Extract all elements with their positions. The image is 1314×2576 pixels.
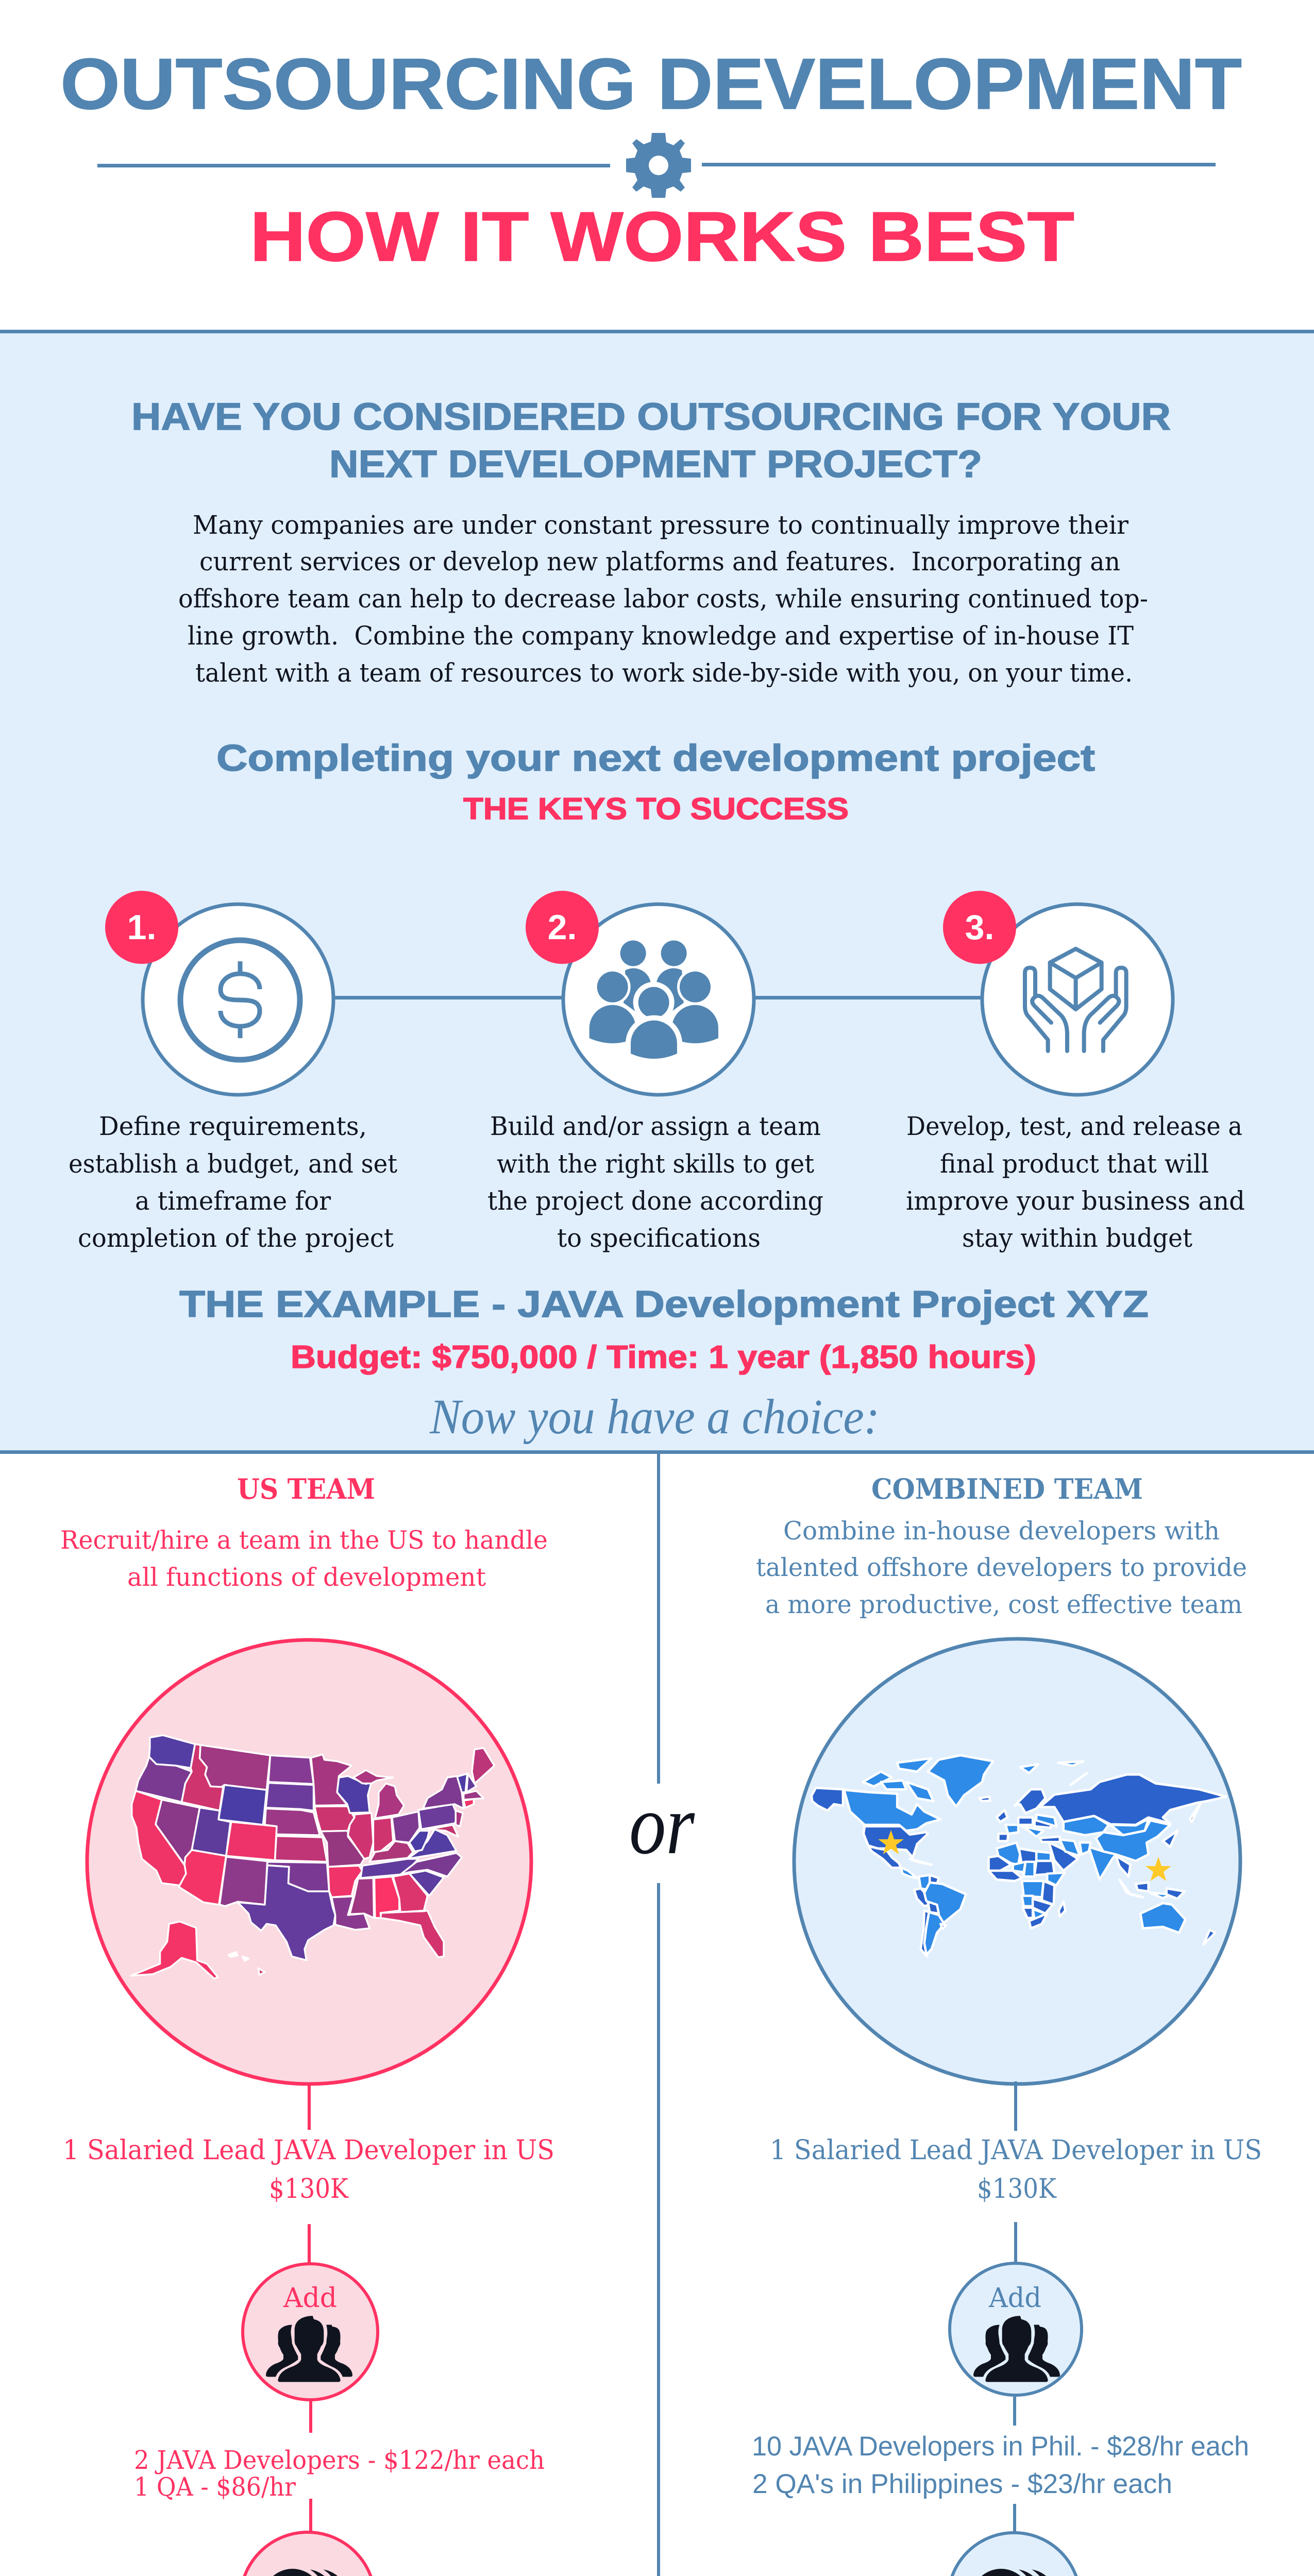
badge: number 1: 1.	[127, 908, 156, 947]
text: lead developer: $130K	[977, 2174, 1057, 2205]
heading: the keys to success: THE KEYS TO SUCCESS	[463, 792, 849, 826]
step 3: develop and release	[906, 891, 1245, 1253]
text: combined team description: talented offshore developers to provide	[756, 1553, 1247, 1582]
text: now you have a choice: Now you have a choice:	[429, 1389, 880, 1444]
text: lead developer	[770, 2135, 1262, 2205]
text block: intro paragraph: talent with a team of resources to work side-by-side with you, on your time.	[195, 658, 1133, 688]
text: step 1 description	[69, 1111, 397, 1253]
text: offshore additions	[752, 2431, 1249, 2499]
heading: have you considered outsourcing: NEXT DEVELOPMENT PROJECT?	[329, 443, 982, 485]
text: step 3 description: improve your business and	[906, 1186, 1245, 1216]
icon: gear divider	[97, 133, 1216, 198]
illustration: world map in circle	[794, 1639, 1240, 2084]
text: US additions	[134, 2445, 545, 2502]
badge: number 2: 2.	[548, 908, 577, 947]
connector	[1013, 2397, 1016, 2426]
icon: hands holding box	[982, 904, 1173, 1095]
text: lead developer	[63, 2135, 554, 2205]
text: offshore additions: 10 JAVA Developers in Phil. - $28/hr each	[752, 2431, 1249, 2462]
divider: vertical lower	[657, 1883, 660, 2576]
text block: intro paragraph: line growth. Combine the company knowledge and expertise of in-house IT	[188, 621, 1134, 651]
text: combined team description	[756, 1516, 1247, 1619]
subtitle: how it works best: HOW IT WORKS BEST	[250, 197, 1074, 276]
text: step 3 description: final product that will	[940, 1149, 1209, 1179]
text: step 2 description: Build and/or assign a team	[490, 1111, 821, 1141]
text: US team description	[60, 1526, 548, 1592]
text: US additions: 1 QA - $86/hr	[134, 2472, 296, 2502]
step 1: define requirements	[69, 891, 397, 1253]
text: lead developer: 1 Salaried Lead JAVA Developer in US	[770, 2135, 1262, 2166]
text: US team description: Recruit/hire a team in the US to handle	[60, 1526, 548, 1555]
text: step 3 description: Develop, test, and release a	[906, 1111, 1242, 1141]
icon: star over Philippines	[1145, 1857, 1171, 1881]
text: step 3 description: stay within budget	[962, 1223, 1192, 1253]
text: step 2 description: the project done according	[487, 1186, 823, 1216]
icon: coins	[948, 2533, 1080, 2576]
panel: combined team	[752, 1472, 1262, 2576]
badge: number 3	[943, 891, 1016, 964]
text block: intro paragraph	[178, 510, 1148, 688]
text block: intro paragraph: current services or develop new platforms and features. Incorporating an	[199, 547, 1120, 577]
connector	[309, 2400, 312, 2433]
badge: number 3: 3.	[965, 908, 994, 947]
connector	[308, 2084, 311, 2130]
text: lead developer: $130K	[269, 2174, 349, 2205]
connector	[1013, 2504, 1016, 2532]
text block: intro paragraph: offshore team can help to decrease labor costs, while ensuring continued top-	[178, 584, 1148, 614]
badge: number 1	[105, 891, 178, 964]
text: step 2 description	[487, 1111, 823, 1253]
icon: add people: Add	[988, 2283, 1041, 2314]
divider: top of comparison	[0, 1450, 1314, 1454]
text: step 1 description: Define requirements,	[99, 1111, 367, 1141]
text: US team description: all functions of development	[127, 1563, 486, 1592]
text block: intro paragraph: Many companies are under constant pressure to continually improve their	[193, 510, 1128, 540]
text: lead developer: 1 Salaried Lead JAVA Developer in US	[63, 2135, 554, 2166]
heading: US team: US TEAM	[237, 1472, 375, 1505]
text: step 3 description	[906, 1111, 1245, 1253]
text: step 1 description: establish a budget, and set	[69, 1149, 397, 1179]
connector	[308, 2224, 311, 2263]
connector	[309, 2499, 312, 2532]
connector	[1014, 2081, 1017, 2131]
title: outsourcing development: OUTSOURCING DEVELOPMENT	[60, 43, 1242, 124]
text: US additions: 2 JAVA Developers - $122/hr each	[134, 2445, 545, 2475]
text: budget and time: Budget: $750,000 / Time: 1 year (1,850 hours)	[291, 1340, 1036, 1375]
text: combined team description: a more productive, cost effective team	[765, 1590, 1242, 1619]
heading: have you considered outsourcing: HAVE YOU CONSIDERED OUTSOURCING FOR YOUR	[131, 395, 1171, 438]
text: offshore additions: 2 QA's in Philippines - $23/hr each	[752, 2469, 1172, 2499]
icon: add people	[950, 2263, 1082, 2395]
panel: US team	[60, 1472, 554, 2576]
icon: dollar circle	[143, 904, 333, 1095]
heading: have you considered outsourcing	[131, 395, 1171, 485]
heading: combined team: COMBINED TEAM	[871, 1472, 1143, 1505]
icon: coins	[240, 2532, 375, 2576]
icon: star over US	[878, 1830, 904, 1854]
icon: add people: Add	[283, 2283, 337, 2314]
icon: add people	[243, 2264, 378, 2400]
heading: the example: THE EXAMPLE - JAVA Development Project XYZ	[179, 1284, 1149, 1325]
panel: introduction and keys to success	[0, 330, 1314, 1452]
text: combined team description: Combine in-house developers with	[783, 1516, 1220, 1546]
illustration: US map in circle	[87, 1640, 531, 2084]
divider: vertical upper	[657, 1453, 660, 1784]
step 2: build a team	[487, 891, 823, 1253]
text: or: or	[629, 1777, 695, 1872]
title block	[60, 43, 1242, 276]
heading: completing your next development project: Completing your next development project	[216, 738, 1095, 779]
connector	[1014, 2222, 1017, 2263]
connector line between steps	[330, 996, 989, 999]
text: step 1 description: a timeframe for	[135, 1186, 331, 1216]
icon: team of people	[563, 904, 754, 1095]
text: step 2 description: with the right skills to get	[497, 1149, 814, 1179]
text: step 2 description: to specifications	[557, 1223, 761, 1253]
text: step 1 description: completion of the project	[78, 1223, 394, 1253]
badge: number 2	[526, 891, 599, 964]
